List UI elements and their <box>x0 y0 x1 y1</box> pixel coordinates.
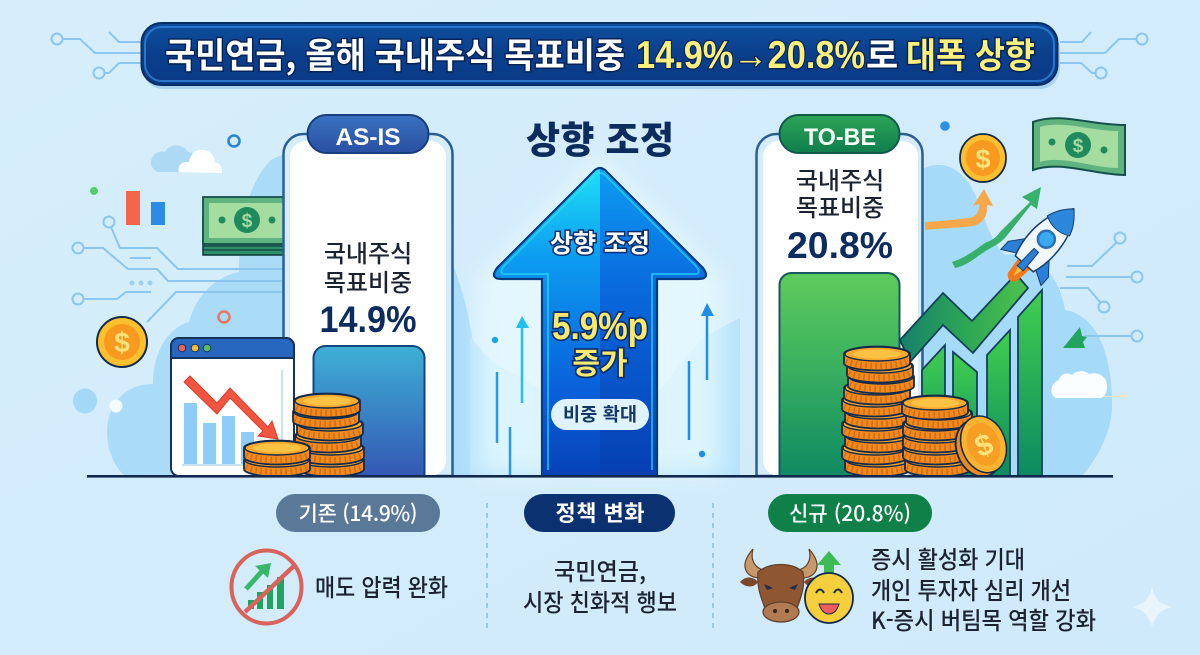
icon: dollar coin left <box>97 317 147 367</box>
cloud: top left <box>151 145 222 173</box>
column divider: right <box>712 503 714 628</box>
arrow text: upward adjustment: 상향 조정 <box>550 224 650 260</box>
icon: dollar coin left: $ <box>114 327 130 358</box>
pill: policy change <box>524 494 675 532</box>
text: expected effects: 개인 투자자 심리 개선 <box>871 571 1071 606</box>
rising bars chart <box>900 274 1042 476</box>
icon: tilted coin: $ <box>971 427 998 464</box>
column divider: left <box>486 503 488 628</box>
cloud: right <box>1051 371 1128 398</box>
text: policy change <box>523 552 677 618</box>
coin stack: left tall <box>293 394 364 476</box>
arrow text: 5.9%p increase <box>552 306 648 383</box>
arrow glow <box>478 155 722 476</box>
column: existing <box>232 494 448 624</box>
decorative dots and rings <box>73 121 950 413</box>
zigzag rising line <box>900 274 1028 362</box>
card: TO-BE <box>756 134 922 476</box>
arrow: green up <box>952 187 1041 268</box>
text: policy change: 국민연금, <box>554 552 646 587</box>
panel: TO-BE <box>756 115 922 476</box>
title text: 대폭 상향 <box>906 28 1035 79</box>
arrow: falling red <box>184 376 278 439</box>
icon: dollar bill right: $ <box>1073 136 1084 157</box>
icon: bull <box>740 549 822 622</box>
pill: expand weight: 비중 확대 <box>563 401 637 427</box>
coin stack: left short <box>244 440 310 476</box>
circuit lines: middle right <box>1060 232 1142 342</box>
center side shapes <box>470 318 740 476</box>
arrow text: 5.9%p increase: 증가 <box>572 339 628 383</box>
sparkle <box>1132 587 1172 627</box>
label pill: TO-BE <box>780 115 900 153</box>
baseline <box>87 475 1113 478</box>
text: expected effects: K-증시 버팀목 역할 강화 <box>871 601 1096 636</box>
title banner <box>142 23 1060 89</box>
text: AS-IS target weight: 국내주식 <box>324 234 412 269</box>
label pill: AS-IS: AS-IS <box>336 124 400 151</box>
icon: tilted coin <box>947 410 1015 483</box>
background cloud: left <box>107 153 479 476</box>
title text <box>165 28 1035 79</box>
icon: coin right top: $ <box>975 144 991 174</box>
pill: new <box>768 494 932 532</box>
text: TO-BE target weight: 목표비중 <box>796 188 884 223</box>
bar: AS-IS value <box>314 346 424 476</box>
pill: expand weight <box>551 399 649 430</box>
title text: 14.9%→20.8% <box>636 34 865 77</box>
pill: new: 신규 (20.8%) <box>789 498 911 528</box>
text: AS-IS target weight: 목표비중 <box>324 263 412 298</box>
title text: 국민연금, 올해 국내주식 목표비중 <box>165 28 625 79</box>
small bars icon <box>126 191 165 225</box>
background cloud: right <box>900 165 1112 476</box>
text: TO-BE target weight <box>787 161 893 266</box>
icon: smile with up arrow <box>805 551 853 623</box>
text: AS-IS target weight <box>320 234 416 340</box>
heading: upward adjustment: 상향 조정 <box>526 110 674 164</box>
icon: rocket <box>989 191 1094 298</box>
circuit lines: top right <box>1060 32 1148 78</box>
big up arrow <box>494 167 706 476</box>
icon: dollar bills left: $ <box>242 211 253 232</box>
circuit lines: middle left <box>72 216 284 322</box>
panel: down chart window <box>171 338 294 476</box>
label pill: TO-BE: TO-BE <box>804 124 876 151</box>
pill: policy change: 정책 변화 <box>556 496 644 528</box>
icon: dollar bills left <box>203 197 293 255</box>
column: new <box>740 494 1096 636</box>
text: AS-IS target weight: 14.9% <box>320 299 416 340</box>
icon: dollar bill right <box>1033 118 1125 175</box>
text: expected effects: 증시 활성화 기대 <box>871 540 1025 575</box>
coin stack: right tall <box>842 346 914 476</box>
column: policy change <box>523 494 677 618</box>
circuit lines: top left <box>52 32 141 78</box>
panel: AS-IS <box>284 115 452 476</box>
text: easing selling pressure: 매도 압력 완화 <box>315 568 448 603</box>
title text: 로 <box>866 28 898 79</box>
bar: TO-BE value <box>780 273 900 476</box>
arrow text: 5.9%p increase: 5.9%p <box>552 306 648 348</box>
coin stack: right short <box>902 396 972 476</box>
icon: prohibited rising chart <box>232 550 302 624</box>
icon: coin right top <box>960 134 1006 182</box>
card: AS-IS <box>284 134 452 476</box>
text: TO-BE target weight: 20.8% <box>787 225 893 266</box>
text: TO-BE target weight: 국내주식 <box>796 161 884 196</box>
small arrows beside center arrow <box>492 303 714 476</box>
pill: existing: 기존 (14.9%) <box>298 498 418 528</box>
icon: green leaf <box>1063 327 1087 348</box>
arrow: orange up <box>925 189 993 230</box>
text: policy change: 시장 친화적 행보 <box>523 583 677 618</box>
label pill: AS-IS <box>308 115 428 153</box>
text: expected effects <box>871 540 1096 636</box>
pill: existing <box>276 494 440 532</box>
